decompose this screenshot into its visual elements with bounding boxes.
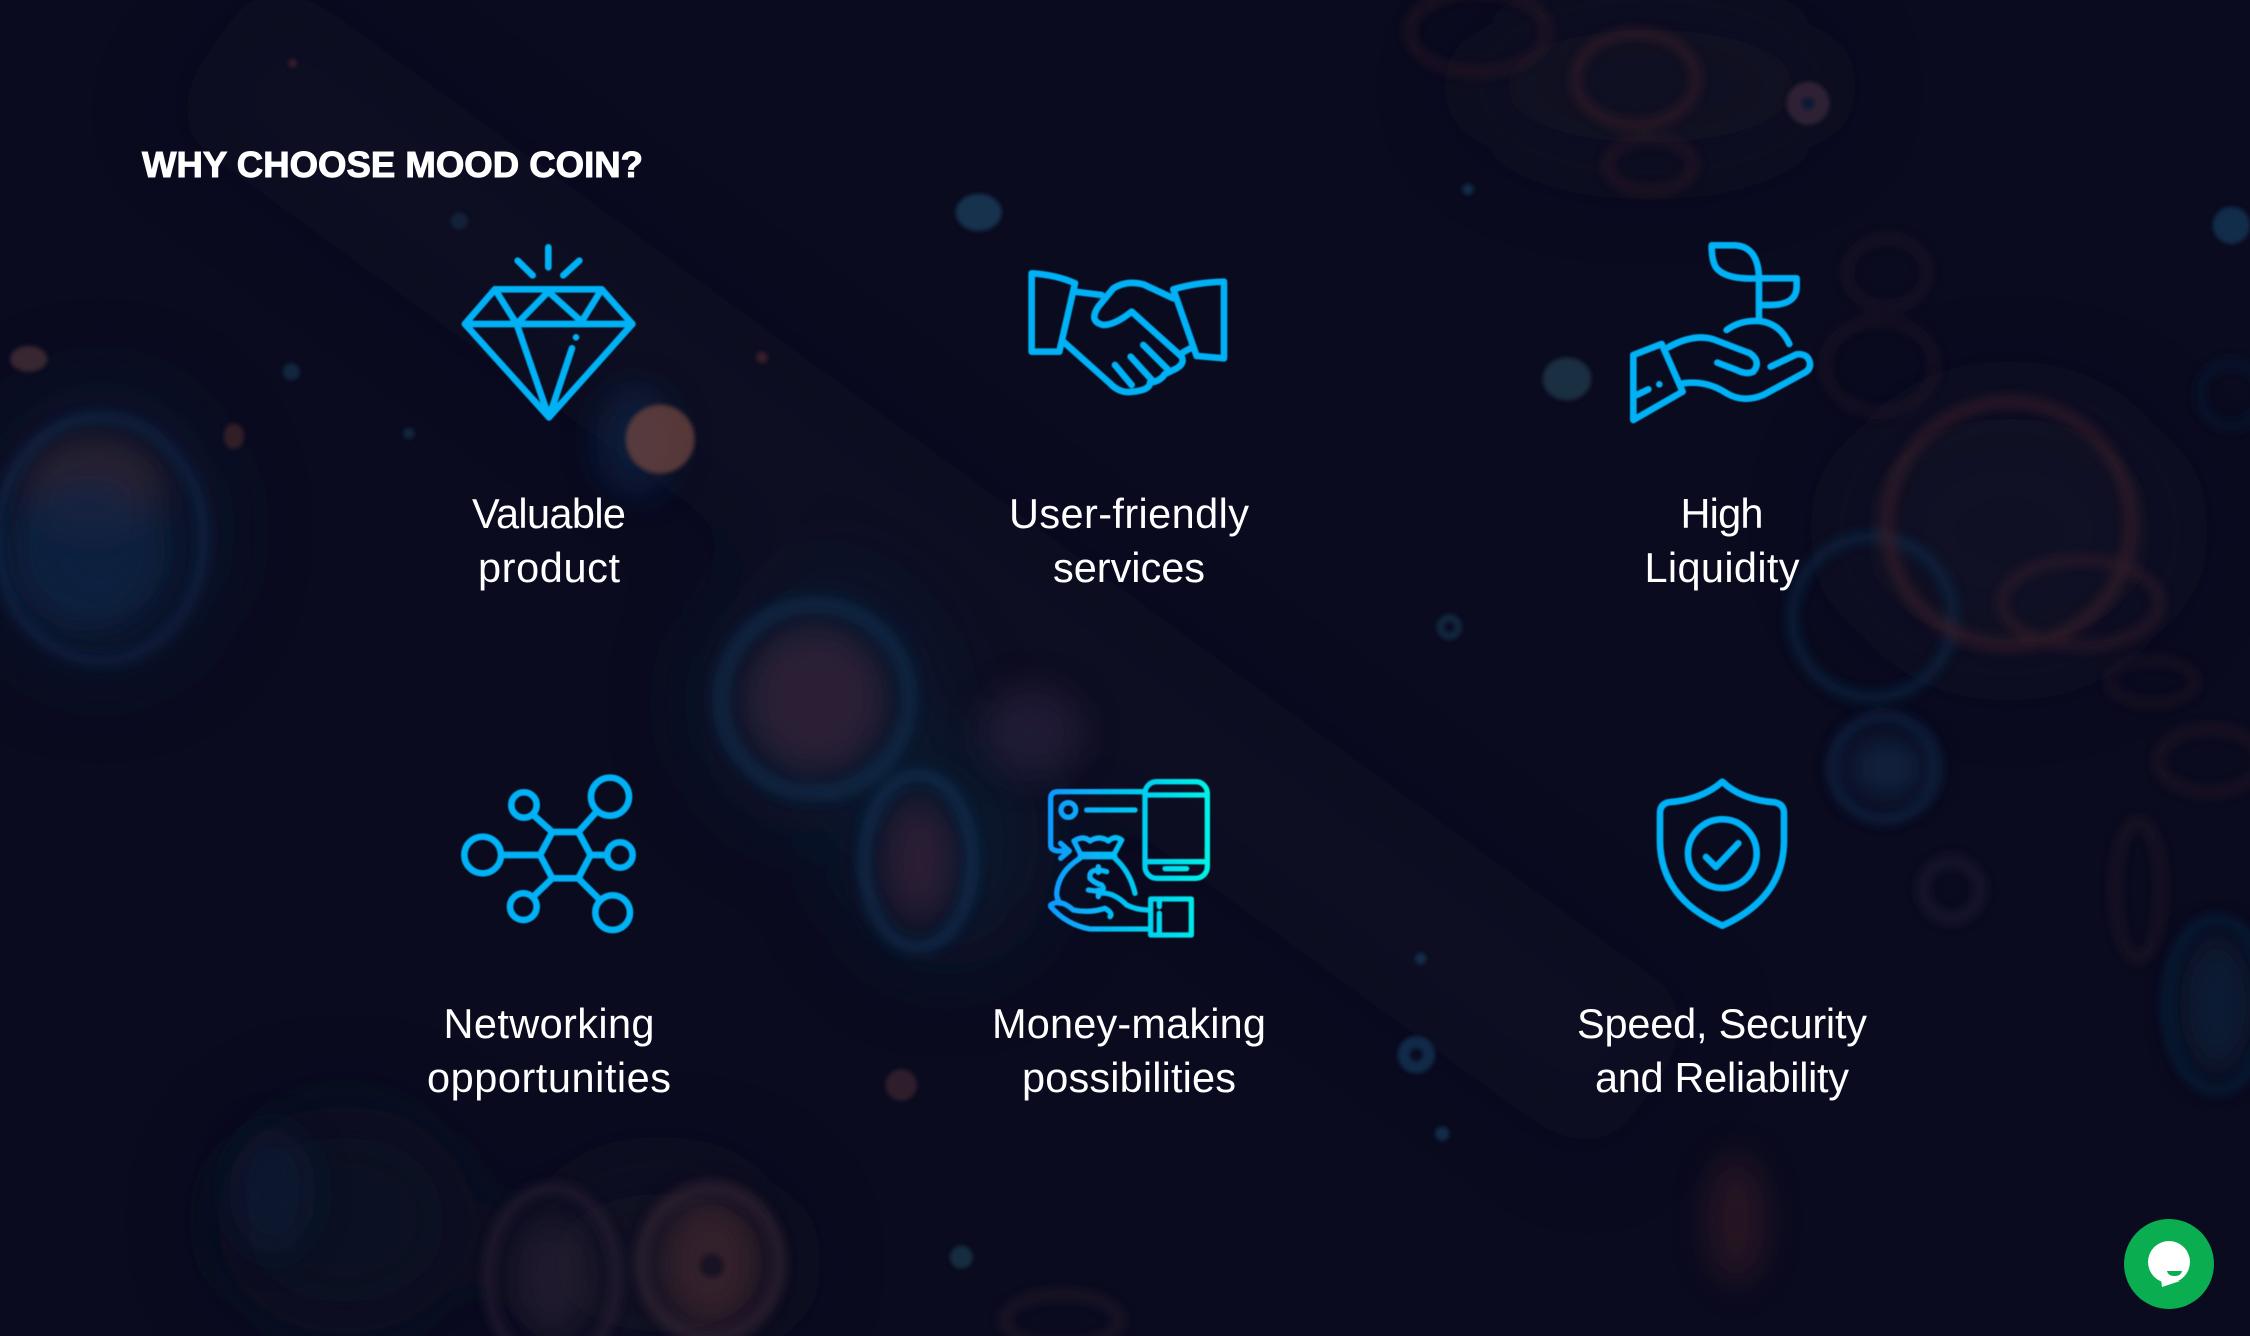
panel: networking opportunities <box>427 778 671 1101</box>
icon: network nodes <box>464 778 633 930</box>
label: money-making possibilities: possibilities <box>1022 1054 1236 1101</box>
chat button <box>2124 1219 2214 1309</box>
panel: money-making possibilities <box>992 782 1266 1101</box>
panel: valuable product <box>465 247 632 591</box>
panel: high liquidity <box>1633 245 1810 591</box>
icon: diamond <box>465 247 632 417</box>
label: user-friendly services: User-friendly <box>1009 490 1249 537</box>
label: user-friendly services: services <box>1053 544 1205 591</box>
panel: speed, security and reliability <box>1577 782 1867 1101</box>
icon: shield with check <box>1660 782 1784 926</box>
label: speed, security and reliability: Speed, Security <box>1577 1000 1867 1047</box>
label: high liquidity: Liquidity <box>1644 544 1800 591</box>
label: high liquidity: High <box>1680 490 1764 537</box>
label: networking opportunities: opportunities <box>427 1054 671 1101</box>
label: valuable product: Valuable <box>472 490 626 537</box>
icon: money bag and phone <box>1051 782 1207 935</box>
title: WHY CHOOSE MOOD COIN? <box>142 144 643 185</box>
label: speed, security and reliability: and Reliability <box>1595 1054 1849 1101</box>
label: money-making possibilities: Money-making <box>992 1000 1266 1047</box>
panel: user-friendly services <box>1009 273 1249 591</box>
icon: hand with plant <box>1633 245 1810 420</box>
icon: handshake <box>1032 273 1224 392</box>
label: networking opportunities: Networking <box>444 1000 654 1047</box>
label: valuable product: product <box>478 544 620 591</box>
